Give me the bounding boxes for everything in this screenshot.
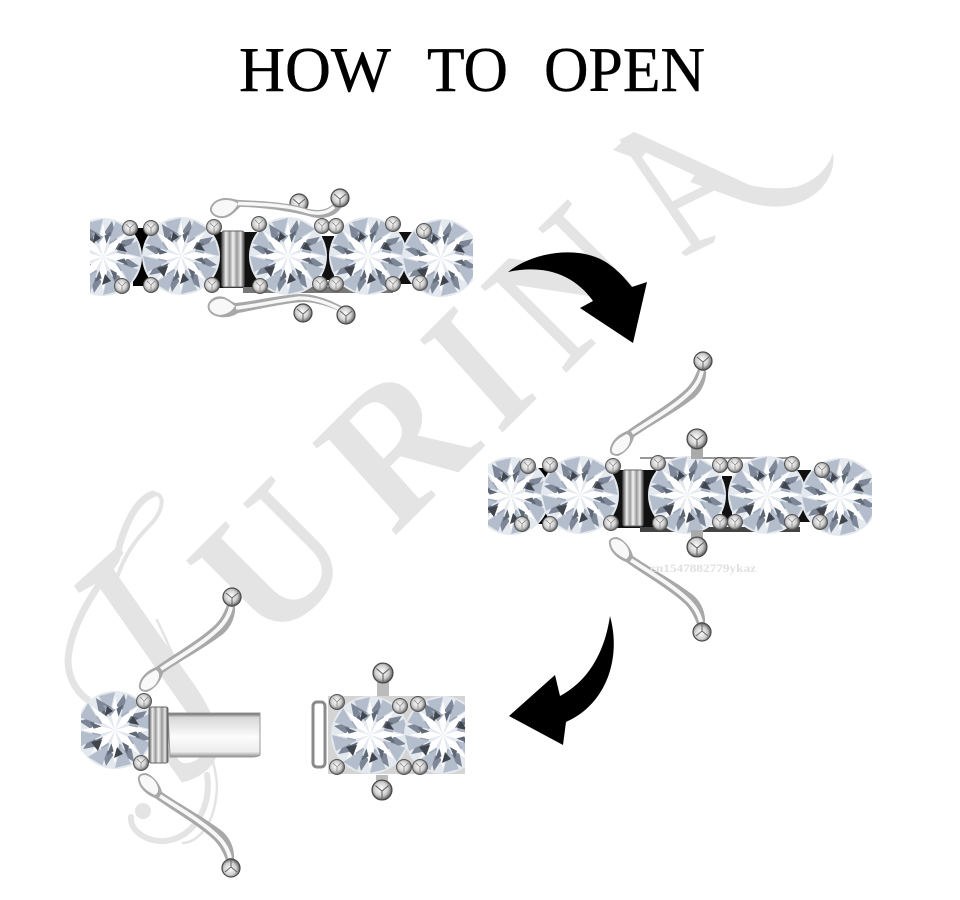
- title: [239, 34, 705, 105]
- bracelet step 2: arms lifted: [472, 352, 879, 641]
- diamonds: [328, 694, 465, 775]
- clasp bar: [222, 231, 244, 287]
- title word: HOW: HOW: [239, 34, 392, 105]
- diamond: [76, 691, 154, 770]
- chain with diamonds: [472, 456, 879, 536]
- clasp bar: [149, 707, 168, 763]
- watermark flourish on J: [68, 494, 217, 843]
- clasp arm top: [210, 189, 349, 218]
- watermark letter A: A: [529, 74, 842, 288]
- clasp bar: [623, 470, 643, 526]
- clasp arm bottom: [138, 773, 240, 877]
- title word: TO: TO: [427, 34, 508, 105]
- bracelet step 3: clasp separated, right part: [313, 663, 482, 800]
- watermark: JURINA: [0, 74, 842, 843]
- watermark letter N: N: [447, 167, 684, 404]
- stopper ball top: [687, 429, 707, 459]
- clasp arm top: [610, 352, 712, 456]
- seller watermark: cn1547882779ykaz: [650, 561, 757, 575]
- arrow: step 1 to step 2: [508, 252, 647, 343]
- bracelet step 3: clasp separated, left part: [76, 588, 260, 877]
- bracelet step 1: closed clasp: [64, 189, 480, 324]
- clasp loop: [313, 702, 325, 767]
- clasp tongue: [168, 713, 260, 757]
- chain with diamonds: [64, 216, 480, 297]
- watermark letter U: U: [152, 442, 389, 679]
- stopper ball bottom: [687, 530, 707, 557]
- clasp arm bottom: [208, 294, 355, 324]
- watermark letter I: I: [387, 269, 568, 467]
- clasp arm bottom: [609, 537, 711, 641]
- watermark flourish on J: end dot: [135, 803, 151, 819]
- stopper ball bottom: [372, 775, 392, 800]
- title word: OPEN: OPEN: [544, 34, 705, 105]
- watermark flourish on A: [613, 132, 834, 207]
- clasp arm top: [139, 588, 241, 692]
- stopper ball top: [373, 663, 393, 696]
- watermark letter R: R: [280, 320, 513, 569]
- arrow: step 2 to step 3: [509, 616, 614, 745]
